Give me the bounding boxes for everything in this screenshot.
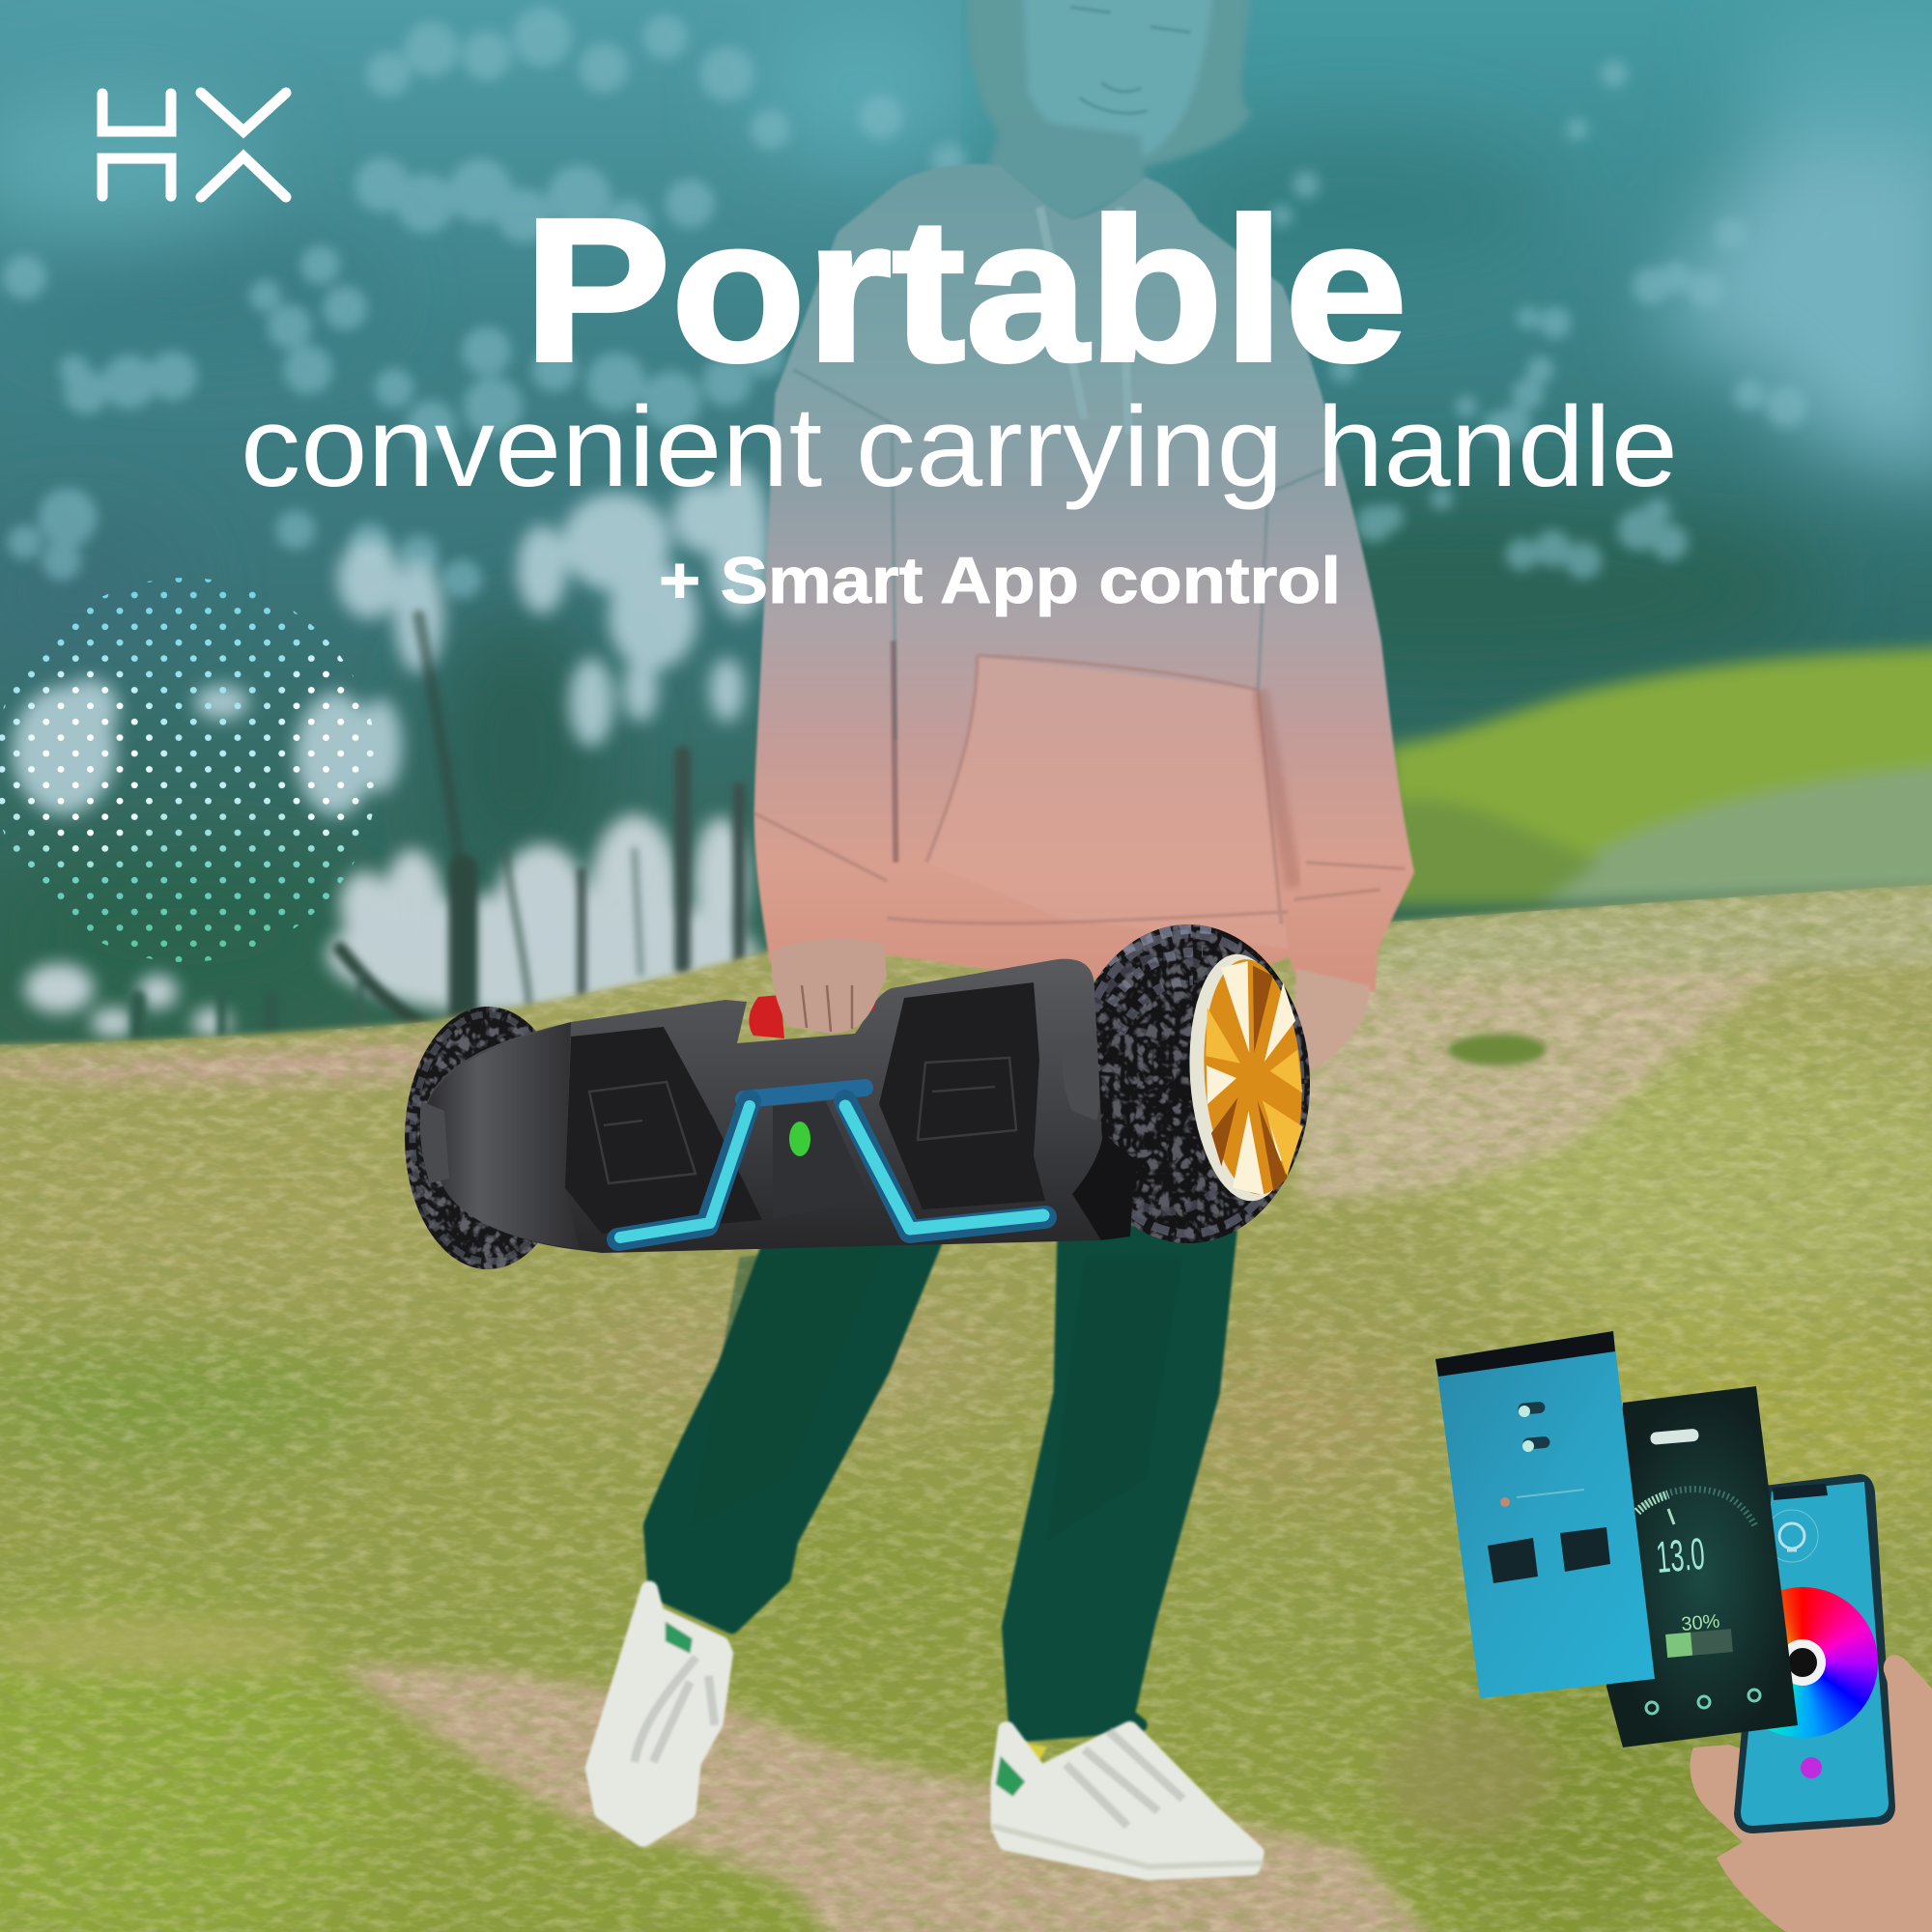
phone: notch	[1773, 1484, 1828, 1500]
person: hair and head	[967, 0, 1251, 224]
person: pink hoodie	[754, 164, 1414, 992]
halftone dot circle	[0, 570, 386, 976]
logo: H mark	[102, 94, 171, 196]
person: hood drawstrings	[1040, 207, 1128, 434]
hoverboard: centre console	[773, 1101, 869, 1219]
hoverboard	[396, 918, 1314, 1285]
phone: wheel centre ring	[1779, 1639, 1826, 1686]
scene: teal tinted trees	[0, 0, 1932, 1084]
phone: nav icons	[1646, 1690, 1760, 1714]
scene: tree trunks	[138, 616, 739, 1041]
scene: green bush	[1388, 647, 1932, 905]
hoverboard: side bumper	[1062, 1038, 1099, 1121]
hoverboard: red carrying handle	[749, 983, 879, 1038]
logo	[102, 93, 286, 197]
tagline: + Smart App control	[659, 544, 1341, 617]
hoverboard: cyan light bar	[618, 1088, 1045, 1239]
phone: speed reading: 13.0	[1654, 1528, 1707, 1582]
scene: foliage bokeh patches	[3, 8, 1807, 599]
hoverboard: grey body shell	[423, 959, 1106, 1253]
scene: pale sky gaps in trees	[13, 466, 769, 815]
phone: toggle switches	[1518, 1402, 1550, 1452]
phone: slider marker	[1500, 1497, 1510, 1507]
phone: thumb	[1884, 1656, 1932, 1729]
phone: purple selected swatch	[1801, 1757, 1822, 1778]
phone: light bulb icon	[1766, 1510, 1818, 1562]
hoverboard: left foot pad	[565, 1027, 762, 1234]
phone: blue settings screen	[1435, 1331, 1655, 1698]
hoverboard: gold wheel hub	[1181, 951, 1310, 1205]
phone: dark action buttons	[1488, 1527, 1610, 1583]
phone: RGB color wheel	[1727, 1587, 1878, 1738]
phone: logo badge	[1650, 1429, 1699, 1445]
phone: battery bar	[1665, 1629, 1733, 1658]
title: Portable	[524, 176, 1407, 404]
person: green trousers	[650, 1233, 1230, 1781]
person: face features	[1072, 8, 1189, 113]
hoverboard: front wheel tire	[1094, 924, 1310, 1243]
hoverboard: rear wheel	[405, 1007, 538, 1269]
hoverboard: green LED	[789, 1122, 810, 1156]
phone: battery percentage: 30%	[1681, 1611, 1721, 1635]
phone: dark speedometer screen	[1606, 1386, 1798, 1747]
person: white sneakers	[594, 1589, 1263, 1871]
subtitle: convenient carrying handle	[241, 384, 1678, 511]
phone: hand holding phone	[1690, 1655, 1932, 1932]
scene: ground and path	[0, 863, 1932, 1932]
person: supporting hand	[1293, 969, 1370, 1072]
phone: color wheel handset	[1727, 1474, 1895, 1833]
hoverboard: tire lower overlap	[1072, 1135, 1135, 1240]
phone: speed gauge arc	[1637, 1490, 1755, 1526]
scene: right path and meadow strip	[0, 887, 1932, 1202]
logo: X mark	[201, 93, 286, 197]
hoverboard: gripping hand	[772, 939, 887, 1034]
hoverboard: end cap	[424, 1022, 580, 1249]
hoverboard: right foot pad	[879, 982, 1045, 1209]
